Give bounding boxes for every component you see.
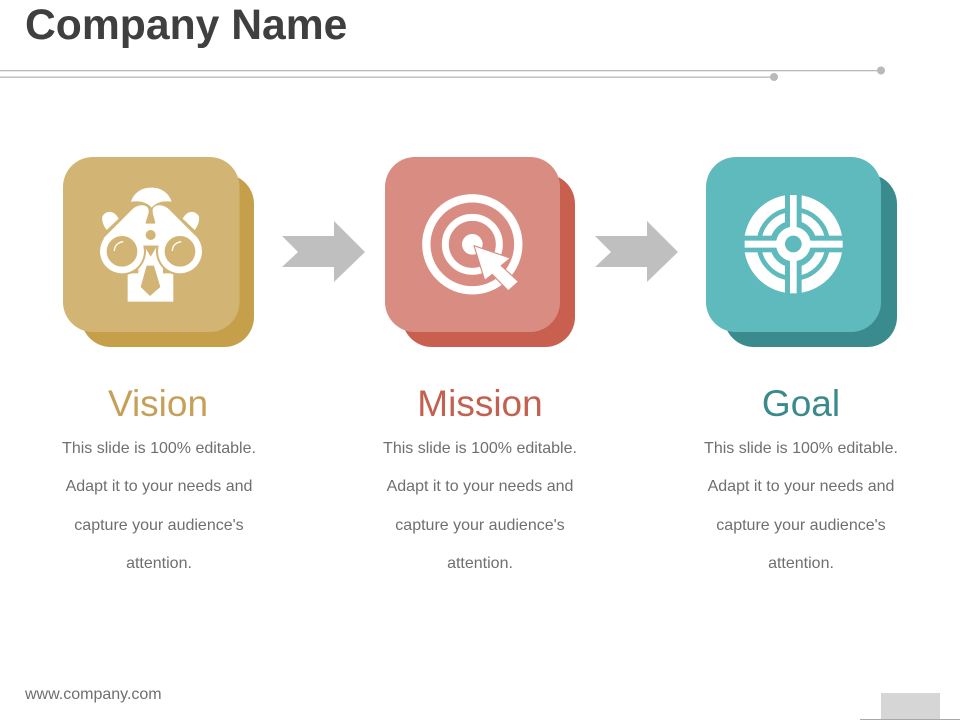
card: vision	[63, 157, 254, 347]
text: vision	[62, 440, 256, 572]
arrow: vision to mission	[282, 221, 365, 282]
text: goal: attention.	[768, 555, 834, 572]
text: goal: This slide is 100% editable.	[704, 440, 898, 457]
icon: crosshair	[741, 192, 846, 296]
card: mission	[385, 157, 575, 347]
text: vision: This slide is 100% editable.	[62, 440, 256, 457]
text: goal: Adapt it to your needs and	[708, 478, 894, 495]
text: mission: capture your audience's	[395, 517, 565, 534]
title: Company Name	[25, 1, 347, 49]
arrow: mission to goal	[595, 221, 678, 282]
icon: binoculars	[98, 188, 204, 302]
card: goal	[706, 157, 897, 347]
heading: goal: Goal	[762, 383, 840, 424]
footer url: www.company.com	[25, 686, 162, 703]
heading: mission: Mission	[417, 383, 543, 424]
text: mission: Adapt it to your needs and	[387, 478, 573, 495]
heading: vision: Vision	[108, 383, 208, 424]
text: mission	[383, 440, 577, 572]
header rule: short line with dot	[0, 73, 778, 81]
header rule: long line with dot	[0, 66, 885, 74]
icon: target with cursor	[426, 198, 518, 290]
text: mission: This slide is 100% editable.	[383, 440, 577, 457]
text: vision: Adapt it to your needs and	[66, 478, 252, 495]
text: vision: attention.	[126, 555, 192, 572]
text: goal	[704, 440, 898, 572]
text: goal: capture your audience's	[716, 517, 886, 534]
text: vision: capture your audience's	[74, 517, 244, 534]
footer tab	[860, 693, 960, 720]
text: mission: attention.	[447, 555, 513, 572]
